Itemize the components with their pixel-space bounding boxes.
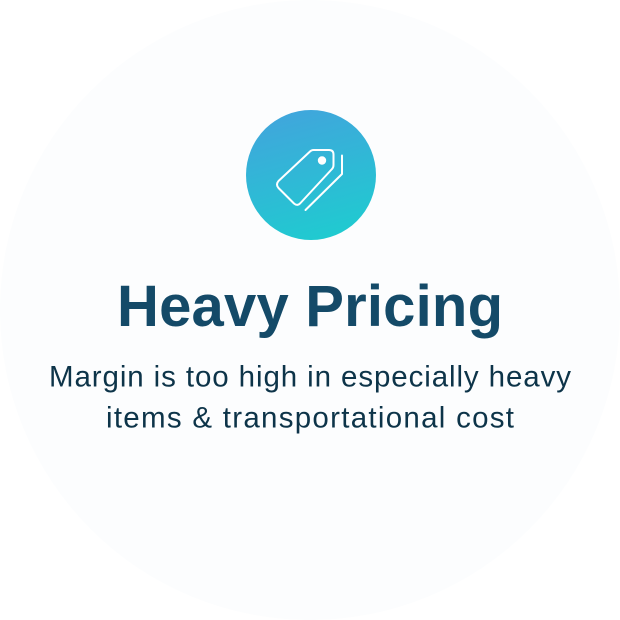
- tag outline: [277, 150, 334, 205]
- title: Heavy Pricing: [117, 274, 503, 339]
- description line 1: Margin is too high in especially heavy: [49, 360, 571, 394]
- icon badge: [246, 110, 376, 240]
- second tag edge: [306, 156, 342, 210]
- tag hole: [318, 156, 326, 165]
- description line 2: items & transportational cost: [106, 402, 514, 434]
- icon: price tags: [246, 110, 376, 240]
- description: [49, 360, 571, 434]
